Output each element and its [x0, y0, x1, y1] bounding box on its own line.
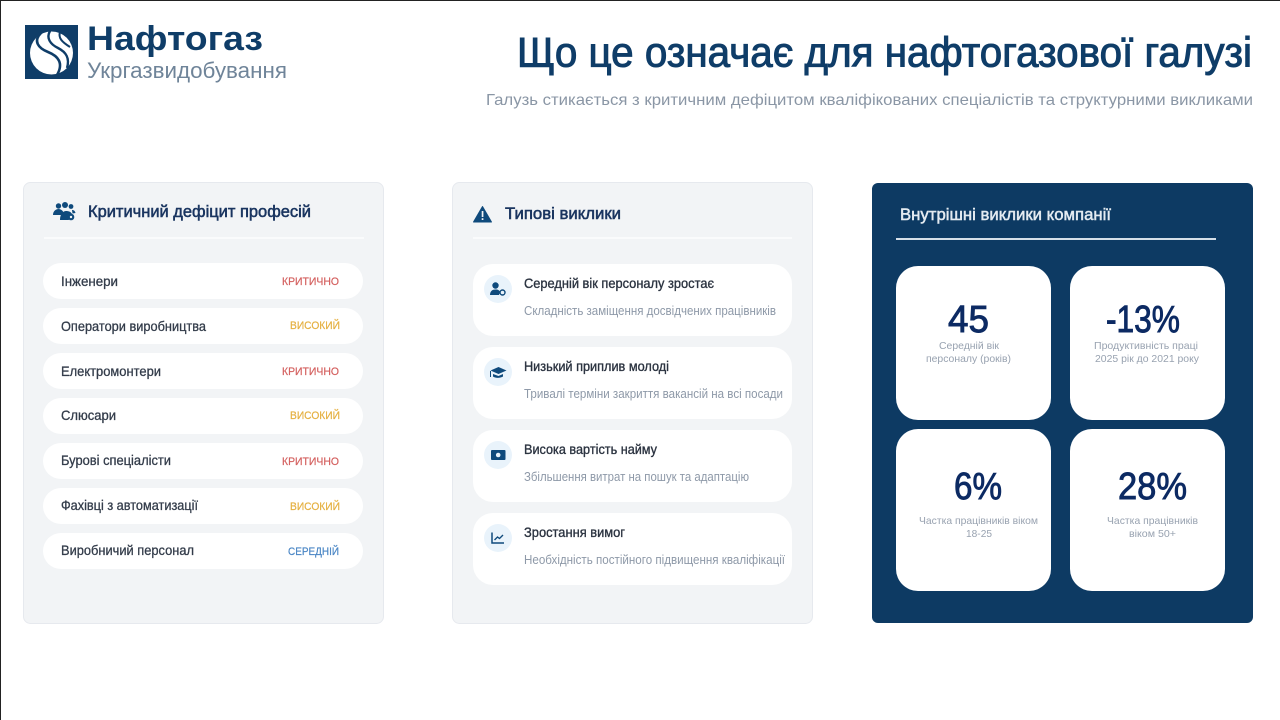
- panel: typical challenges: [452, 182, 812, 624]
- row: Оператори виробництва: ВИСОКИЙ: [290, 319, 340, 332]
- card: low youth inflow: Низький приплив молоді: [524, 358, 669, 374]
- icon: warning triangle: [474, 206, 492, 222]
- stat card: 45: [896, 266, 1051, 420]
- card: growing requirements: [473, 513, 792, 585]
- stat card: 6%: [896, 429, 1051, 591]
- row: Виробничий персонал: [43, 533, 363, 569]
- row: Інженери: КРИТИЧНО: [282, 276, 339, 288]
- row: Бурові спеціалісти: КРИТИЧНО: [282, 456, 339, 468]
- panel: internal company challenges: [872, 183, 1253, 623]
- stat card: 45: Середній вік: [939, 340, 999, 352]
- icon: graduation cap: [484, 358, 512, 386]
- stat card: 28%: [1070, 429, 1225, 591]
- icon: person with clock: [484, 275, 512, 303]
- logo name: Нафтогаз: [87, 20, 263, 58]
- heading: Критичний дефіцит професій: [88, 202, 311, 221]
- row: Фахівці з автоматизації: Фахівці з автоматизації: [61, 497, 198, 513]
- row: Слюсари: [43, 398, 363, 434]
- stat card: -13%: 2025 рік до 2021 року: [1095, 353, 1200, 365]
- row: Виробничий персонал: СЕРЕДНІЙ: [288, 545, 339, 558]
- card: ageing staff: [473, 264, 792, 336]
- card: high hiring cost: Збільшення витрат на пошук та адаптацію: [524, 470, 749, 484]
- row: Електромонтери: Електромонтери: [61, 363, 161, 379]
- stat card: 28%: 28%: [1118, 466, 1187, 508]
- heading: Типові виклики: [505, 204, 621, 223]
- card: ageing staff: Середній вік персоналу зростає: [524, 275, 714, 291]
- row: Слюсари: ВИСОКИЙ: [290, 409, 340, 422]
- icon: people group: [53, 202, 76, 220]
- card: high hiring cost: [473, 430, 792, 502]
- card: low youth inflow: Тривалі терміни закриття вакансій на всі посади: [524, 387, 783, 401]
- stat card: 6%: Частка працівників віком: [919, 515, 1038, 527]
- stat card: -13%: [1070, 266, 1225, 420]
- logo: Нафтогаз Укргазвидобування: [25, 20, 287, 83]
- row: Бурові спеціалісти: [43, 443, 363, 479]
- row: Слюсари: Слюсари: [61, 407, 116, 423]
- row: Фахівці з автоматизації: ВИСОКИЙ: [290, 500, 340, 513]
- row: Оператори виробництва: Оператори виробництва: [61, 318, 206, 334]
- heading: Внутрішні виклики компанії: [900, 205, 1111, 224]
- card: growing requirements: Зростання вимог: [524, 524, 625, 540]
- icon: line chart: [484, 524, 512, 552]
- row: Бурові спеціалісти: Бурові спеціалісти: [61, 452, 171, 468]
- card: low youth inflow: [473, 347, 792, 419]
- stat card: 28%: віком 50+: [1129, 528, 1176, 540]
- row: Електромонтери: КРИТИЧНО: [282, 366, 339, 378]
- card: growing requirements: Необхідність постійного підвищення кваліфікації: [524, 553, 785, 567]
- stat card: 6%: 6%: [954, 466, 1002, 508]
- subtitle: Галузь стикається з критичним дефіцитом кваліфікованих спеціалістів та структурними викликами: [486, 92, 1253, 109]
- row: Оператори виробництва: [43, 308, 363, 344]
- icon: logo mark: [25, 25, 78, 79]
- logo subtitle: Укргазвидобування: [87, 58, 287, 83]
- stat card: 6%: 18-25: [966, 528, 992, 540]
- panel: critical professions shortage: [24, 182, 384, 624]
- card: high hiring cost: Висока вартість найму: [524, 441, 657, 457]
- stat card: -13%: -13%: [1106, 299, 1180, 341]
- card: ageing staff: Складність заміщення досвідчених працівників: [524, 304, 776, 318]
- title: Що це означає для нафтогазової галузі: [517, 28, 1252, 76]
- row: Фахівці з автоматизації: [43, 488, 363, 524]
- row: Інженери: Інженери: [61, 273, 118, 289]
- row: Електромонтери: [43, 353, 363, 389]
- stat card: 45: персоналу (років): [926, 353, 1011, 365]
- stat card: 45: 45: [948, 299, 989, 341]
- stat card: -13%: Продуктивність праці: [1094, 340, 1198, 352]
- row: Інженери: [43, 263, 363, 299]
- row: Виробничий персонал: Виробничий персонал: [61, 542, 194, 558]
- stat card: 28%: Частка працівників: [1107, 515, 1198, 527]
- icon: money bill: [484, 441, 512, 469]
